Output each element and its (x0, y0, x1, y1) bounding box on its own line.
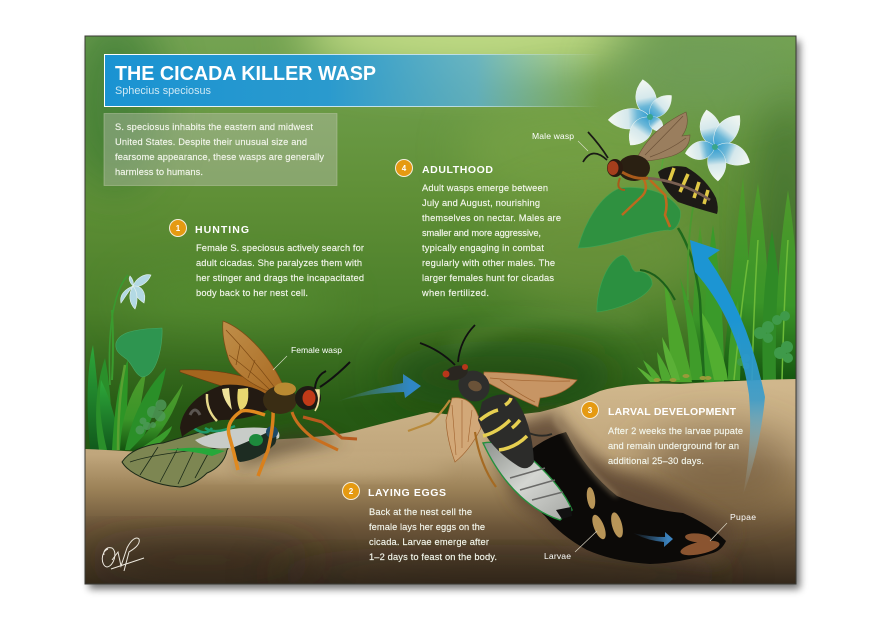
front legs (292, 412, 338, 450)
hind legs (228, 411, 265, 470)
badge 3 (582, 402, 598, 418)
body adulthood: Adult wasps emerge between (422, 183, 548, 193)
body adulthood: July and August, nourishing (422, 198, 540, 208)
head (295, 386, 321, 410)
male wasp (583, 112, 718, 227)
grass seeds (654, 374, 712, 382)
flower 2 (683, 108, 754, 182)
label: pupae (710, 512, 756, 541)
step 3: larval development (582, 402, 743, 466)
label: larvae (544, 531, 597, 561)
body adulthood: larger females hunt for cicadas (422, 273, 554, 283)
body hunting: adult cicadas. She paralyzes them with (196, 258, 362, 268)
heading adulthood: ADULTHOOD (422, 164, 493, 176)
body larval development (608, 426, 743, 466)
arrow: hunting to laying eggs (341, 374, 421, 400)
intro text box: United States. Despite their unusual size and (115, 137, 307, 147)
heading larval development: LARVAL DEVELOPMENT (608, 406, 737, 418)
head (607, 159, 623, 177)
legs (622, 178, 646, 215)
legs (408, 400, 450, 431)
abdomen (478, 394, 534, 468)
heart leaf right (597, 255, 652, 312)
intro text box: harmless to humans. (115, 167, 203, 177)
body adulthood: when fertilized. (421, 288, 489, 298)
body hunting: her stinger and drags the incapacitated (196, 273, 364, 283)
heading laying eggs: LAYING EGGS (368, 487, 446, 499)
badge 1 (170, 220, 186, 236)
arrow: larval development to adulthood (690, 240, 765, 495)
forewing lower (180, 370, 267, 394)
body larval development: additional 25–30 days. (608, 456, 704, 466)
pupae (680, 533, 720, 556)
cicada prey (hunting) (122, 425, 279, 487)
body hunting: body back to her nest cell. (196, 288, 308, 298)
heart leaf left (116, 328, 162, 377)
forest background (86, 36, 796, 452)
label: pupae: Pupae (730, 512, 756, 522)
badge 2 (342, 482, 360, 500)
body hunting (196, 243, 364, 298)
body adulthood (421, 183, 561, 298)
antennae (320, 362, 350, 387)
ground (80, 379, 800, 591)
body laying eggs: female lays her eggs on the (369, 522, 485, 532)
female wasp laying eggs (408, 325, 577, 487)
abdomen (180, 385, 275, 437)
body adulthood: typically engaging in combat (422, 243, 544, 253)
body adulthood: themselves on nectar. Males are (422, 213, 561, 223)
intro text box (104, 114, 337, 186)
illustration panel (86, 36, 796, 584)
abdomen (658, 166, 718, 214)
panel drop shadow (89, 41, 800, 589)
larvae (586, 487, 623, 540)
body larval development: and remain underground for an (608, 441, 739, 451)
step 4: adulthood (396, 160, 561, 298)
badge 2: 2 (349, 487, 354, 496)
heading hunting: HUNTING (195, 224, 249, 236)
subtitle: Sphecius speciosus (115, 85, 211, 97)
label: female wasp (273, 345, 342, 370)
burrow (495, 408, 735, 564)
stems right (678, 228, 704, 380)
thorax (458, 370, 490, 402)
label: male wasp: Male wasp (532, 131, 574, 141)
body laying eggs: cicada. Larvae emerge after (369, 537, 489, 547)
step 1: hunting (170, 220, 364, 298)
badge 4: 4 (402, 164, 407, 173)
body laying eggs: 1–2 days to feast on the body. (369, 552, 497, 562)
body adulthood: regularly with other males. The (422, 258, 555, 268)
title bar (104, 54, 600, 107)
body laying eggs (369, 507, 497, 562)
badge 3: 3 (588, 406, 593, 415)
label: female wasp: Female wasp (291, 345, 342, 355)
small flower left (109, 275, 151, 385)
thorax (618, 155, 650, 181)
antennae (420, 343, 455, 365)
forewing upper (223, 321, 283, 393)
cicada in burrow (483, 442, 572, 520)
right grass (637, 158, 796, 382)
step 2: laying eggs (342, 482, 497, 562)
intro text box: fearsome appearance, these wasps are generally (115, 152, 324, 162)
badge 4 (396, 160, 412, 176)
panel border (85, 36, 796, 584)
flower 1 (608, 79, 672, 146)
body laying eggs: Back at the nest cell the (369, 507, 472, 517)
signature (102, 538, 144, 571)
thorax (263, 386, 297, 414)
left wing (446, 398, 481, 462)
body adulthood: smaller and more aggressive, (422, 228, 541, 238)
body larval development: After 2 weeks the larvae pupate (608, 426, 743, 436)
larvae and pupae (586, 487, 721, 558)
label: larvae: Larvae (544, 551, 571, 561)
antennae (588, 132, 608, 158)
body hunting: Female S. speciosus actively search for (196, 243, 364, 253)
left grass (88, 310, 183, 452)
label: male wasp (532, 131, 588, 151)
female wasp hunting (180, 321, 357, 476)
badge 1: 1 (176, 224, 181, 233)
clover right (737, 311, 793, 370)
arrow: burrow larvae to pupae (633, 532, 673, 547)
big leaf right (578, 188, 680, 248)
clover left (136, 400, 166, 434)
heading: THE CICADA KILLER WASP (115, 63, 376, 85)
head (445, 366, 468, 380)
right wing (483, 372, 577, 407)
wings (637, 112, 690, 161)
intro text box: S. speciosus inhabits the eastern and midwest (115, 122, 313, 132)
